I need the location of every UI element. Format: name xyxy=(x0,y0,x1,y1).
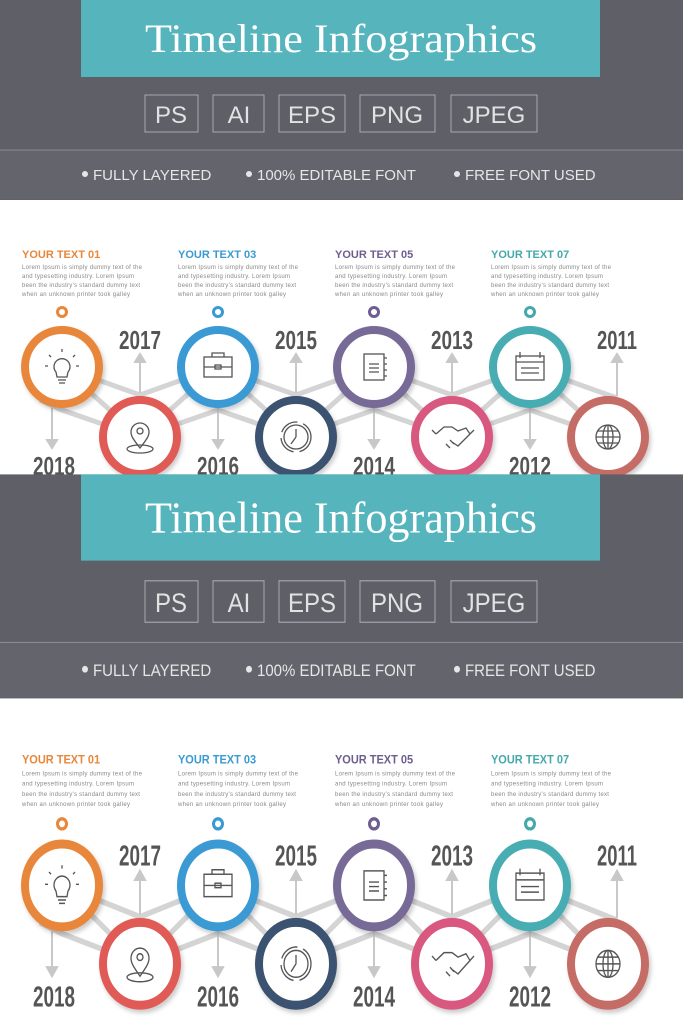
text blocks: YOUR TEXT 01 xyxy=(22,249,100,261)
text blocks: been the industry's standard dummy text xyxy=(22,283,140,289)
text blocks: and typesetting industry. Lorem Ipsum xyxy=(491,780,603,788)
format boxes: PS xyxy=(155,589,187,618)
text blocks: been the industry's standard dummy text xyxy=(335,283,453,289)
header background xyxy=(0,0,683,200)
timeline xyxy=(21,249,645,481)
text blocks: when an unknown printer took galley xyxy=(334,292,443,298)
text blocks: YOUR TEXT 03 xyxy=(178,249,256,261)
text blocks: Lorem Ipsum is simply dummy text of the xyxy=(335,265,456,271)
text blocks: when an unknown printer took galley xyxy=(21,801,131,808)
text blocks: and typesetting industry. Lorem Ipsum xyxy=(335,274,447,280)
format boxes: PS xyxy=(155,102,187,129)
years: 2011 xyxy=(597,325,637,355)
text blocks: and typesetting industry. Lorem Ipsum xyxy=(491,274,603,280)
format boxes xyxy=(145,581,537,622)
connector lines xyxy=(39,378,618,426)
text blocks: Lorem Ipsum is simply dummy text of the xyxy=(22,265,143,271)
years: 2014 xyxy=(353,451,395,481)
years: 2012 xyxy=(509,451,551,481)
text blocks: Lorem Ipsum is simply dummy text of the xyxy=(491,770,611,778)
text blocks: been the industry's standard dummy text xyxy=(491,791,609,798)
years: 2012 xyxy=(509,980,551,1013)
section: bottom copy xyxy=(0,474,683,1013)
text blocks: when an unknown printer took galley xyxy=(177,801,287,808)
text blocks: when an unknown printer took galley xyxy=(177,292,286,298)
text blocks: YOUR TEXT 05 xyxy=(335,753,414,767)
text blocks: been the industry's standard dummy text xyxy=(178,791,296,798)
arrows xyxy=(47,871,622,976)
years: 2015 xyxy=(275,839,317,872)
years xyxy=(33,325,637,481)
text blocks: been the industry's standard dummy text xyxy=(335,791,453,798)
text blocks xyxy=(21,249,612,298)
circles xyxy=(25,844,645,1005)
feature bullets: FULLY LAYERED xyxy=(93,662,211,680)
years: 2016 xyxy=(197,451,239,481)
text blocks: when an unknown printer took galley xyxy=(490,292,599,298)
text blocks: YOUR TEXT 05 xyxy=(335,249,413,261)
text blocks: Lorem Ipsum is simply dummy text of the xyxy=(22,770,142,778)
feature bullets: 100% EDITABLE FONT xyxy=(257,662,416,680)
feature bullets: FULLY LAYERED xyxy=(93,167,212,184)
years: 2018 xyxy=(33,451,75,481)
text blocks: and typesetting industry. Lorem Ipsum xyxy=(22,274,134,280)
text blocks: been the industry's standard dummy text xyxy=(491,283,609,289)
text blocks: been the industry's standard dummy text xyxy=(22,791,140,798)
years: 2013 xyxy=(431,325,473,355)
years: 2014 xyxy=(353,980,395,1013)
feature bullets: FREE FONT USED xyxy=(465,167,596,184)
section: top copy xyxy=(0,0,683,481)
text blocks: and typesetting industry. Lorem Ipsum xyxy=(335,780,447,788)
feature bullets xyxy=(82,662,595,680)
text blocks: been the industry's standard dummy text xyxy=(178,283,296,289)
format boxes: JPEG xyxy=(463,589,525,618)
small rings xyxy=(58,819,534,829)
format boxes: JPEG xyxy=(463,102,525,129)
format boxes: AI xyxy=(228,102,250,129)
icons xyxy=(45,865,620,982)
header background xyxy=(0,474,683,698)
text blocks: Lorem Ipsum is simply dummy text of the xyxy=(178,265,299,271)
timeline xyxy=(21,753,645,1013)
text blocks: and typesetting industry. Lorem Ipsum xyxy=(178,780,290,788)
text blocks: when an unknown printer took galley xyxy=(21,292,130,298)
feature bullets: FREE FONT USED xyxy=(465,662,595,680)
title banner xyxy=(81,474,600,561)
format boxes xyxy=(145,95,537,132)
text blocks: Lorem Ipsum is simply dummy text of the xyxy=(335,770,455,778)
circles xyxy=(25,330,645,474)
format boxes: EPS xyxy=(288,589,336,618)
icons xyxy=(45,349,620,453)
text blocks: and typesetting industry. Lorem Ipsum xyxy=(178,274,290,280)
connector lines xyxy=(40,885,617,964)
years: 2017 xyxy=(119,839,161,872)
years: 2018 xyxy=(33,980,75,1013)
years: 2017 xyxy=(119,325,161,355)
feature bullets: 100% EDITABLE FONT xyxy=(257,167,416,184)
text blocks: YOUR TEXT 07 xyxy=(491,249,569,261)
title banner xyxy=(81,0,600,77)
text blocks: YOUR TEXT 03 xyxy=(178,753,257,767)
years: 2016 xyxy=(197,980,239,1013)
text blocks: when an unknown printer took galley xyxy=(334,801,444,808)
format boxes: PNG xyxy=(371,589,423,618)
format boxes: EPS xyxy=(288,102,336,129)
text blocks: Lorem Ipsum is simply dummy text of the xyxy=(178,770,298,778)
text blocks: YOUR TEXT 01 xyxy=(22,753,101,767)
years xyxy=(33,839,637,1013)
arrows xyxy=(47,354,622,448)
format boxes: AI xyxy=(228,589,250,618)
format boxes: PNG xyxy=(371,102,423,129)
text blocks xyxy=(21,753,611,808)
text blocks: YOUR TEXT 07 xyxy=(491,753,569,767)
years: 2013 xyxy=(431,839,473,872)
text blocks: when an unknown printer took galley xyxy=(490,801,600,808)
years: 2015 xyxy=(275,325,317,355)
years: 2011 xyxy=(597,839,637,872)
title banner: Timeline Infographics xyxy=(145,16,537,61)
feature bullets xyxy=(82,170,595,180)
title banner: Timeline Infographics xyxy=(145,494,537,543)
text blocks: Lorem Ipsum is simply dummy text of the xyxy=(491,265,612,271)
small rings xyxy=(58,308,534,316)
text blocks: and typesetting industry. Lorem Ipsum xyxy=(22,780,134,788)
